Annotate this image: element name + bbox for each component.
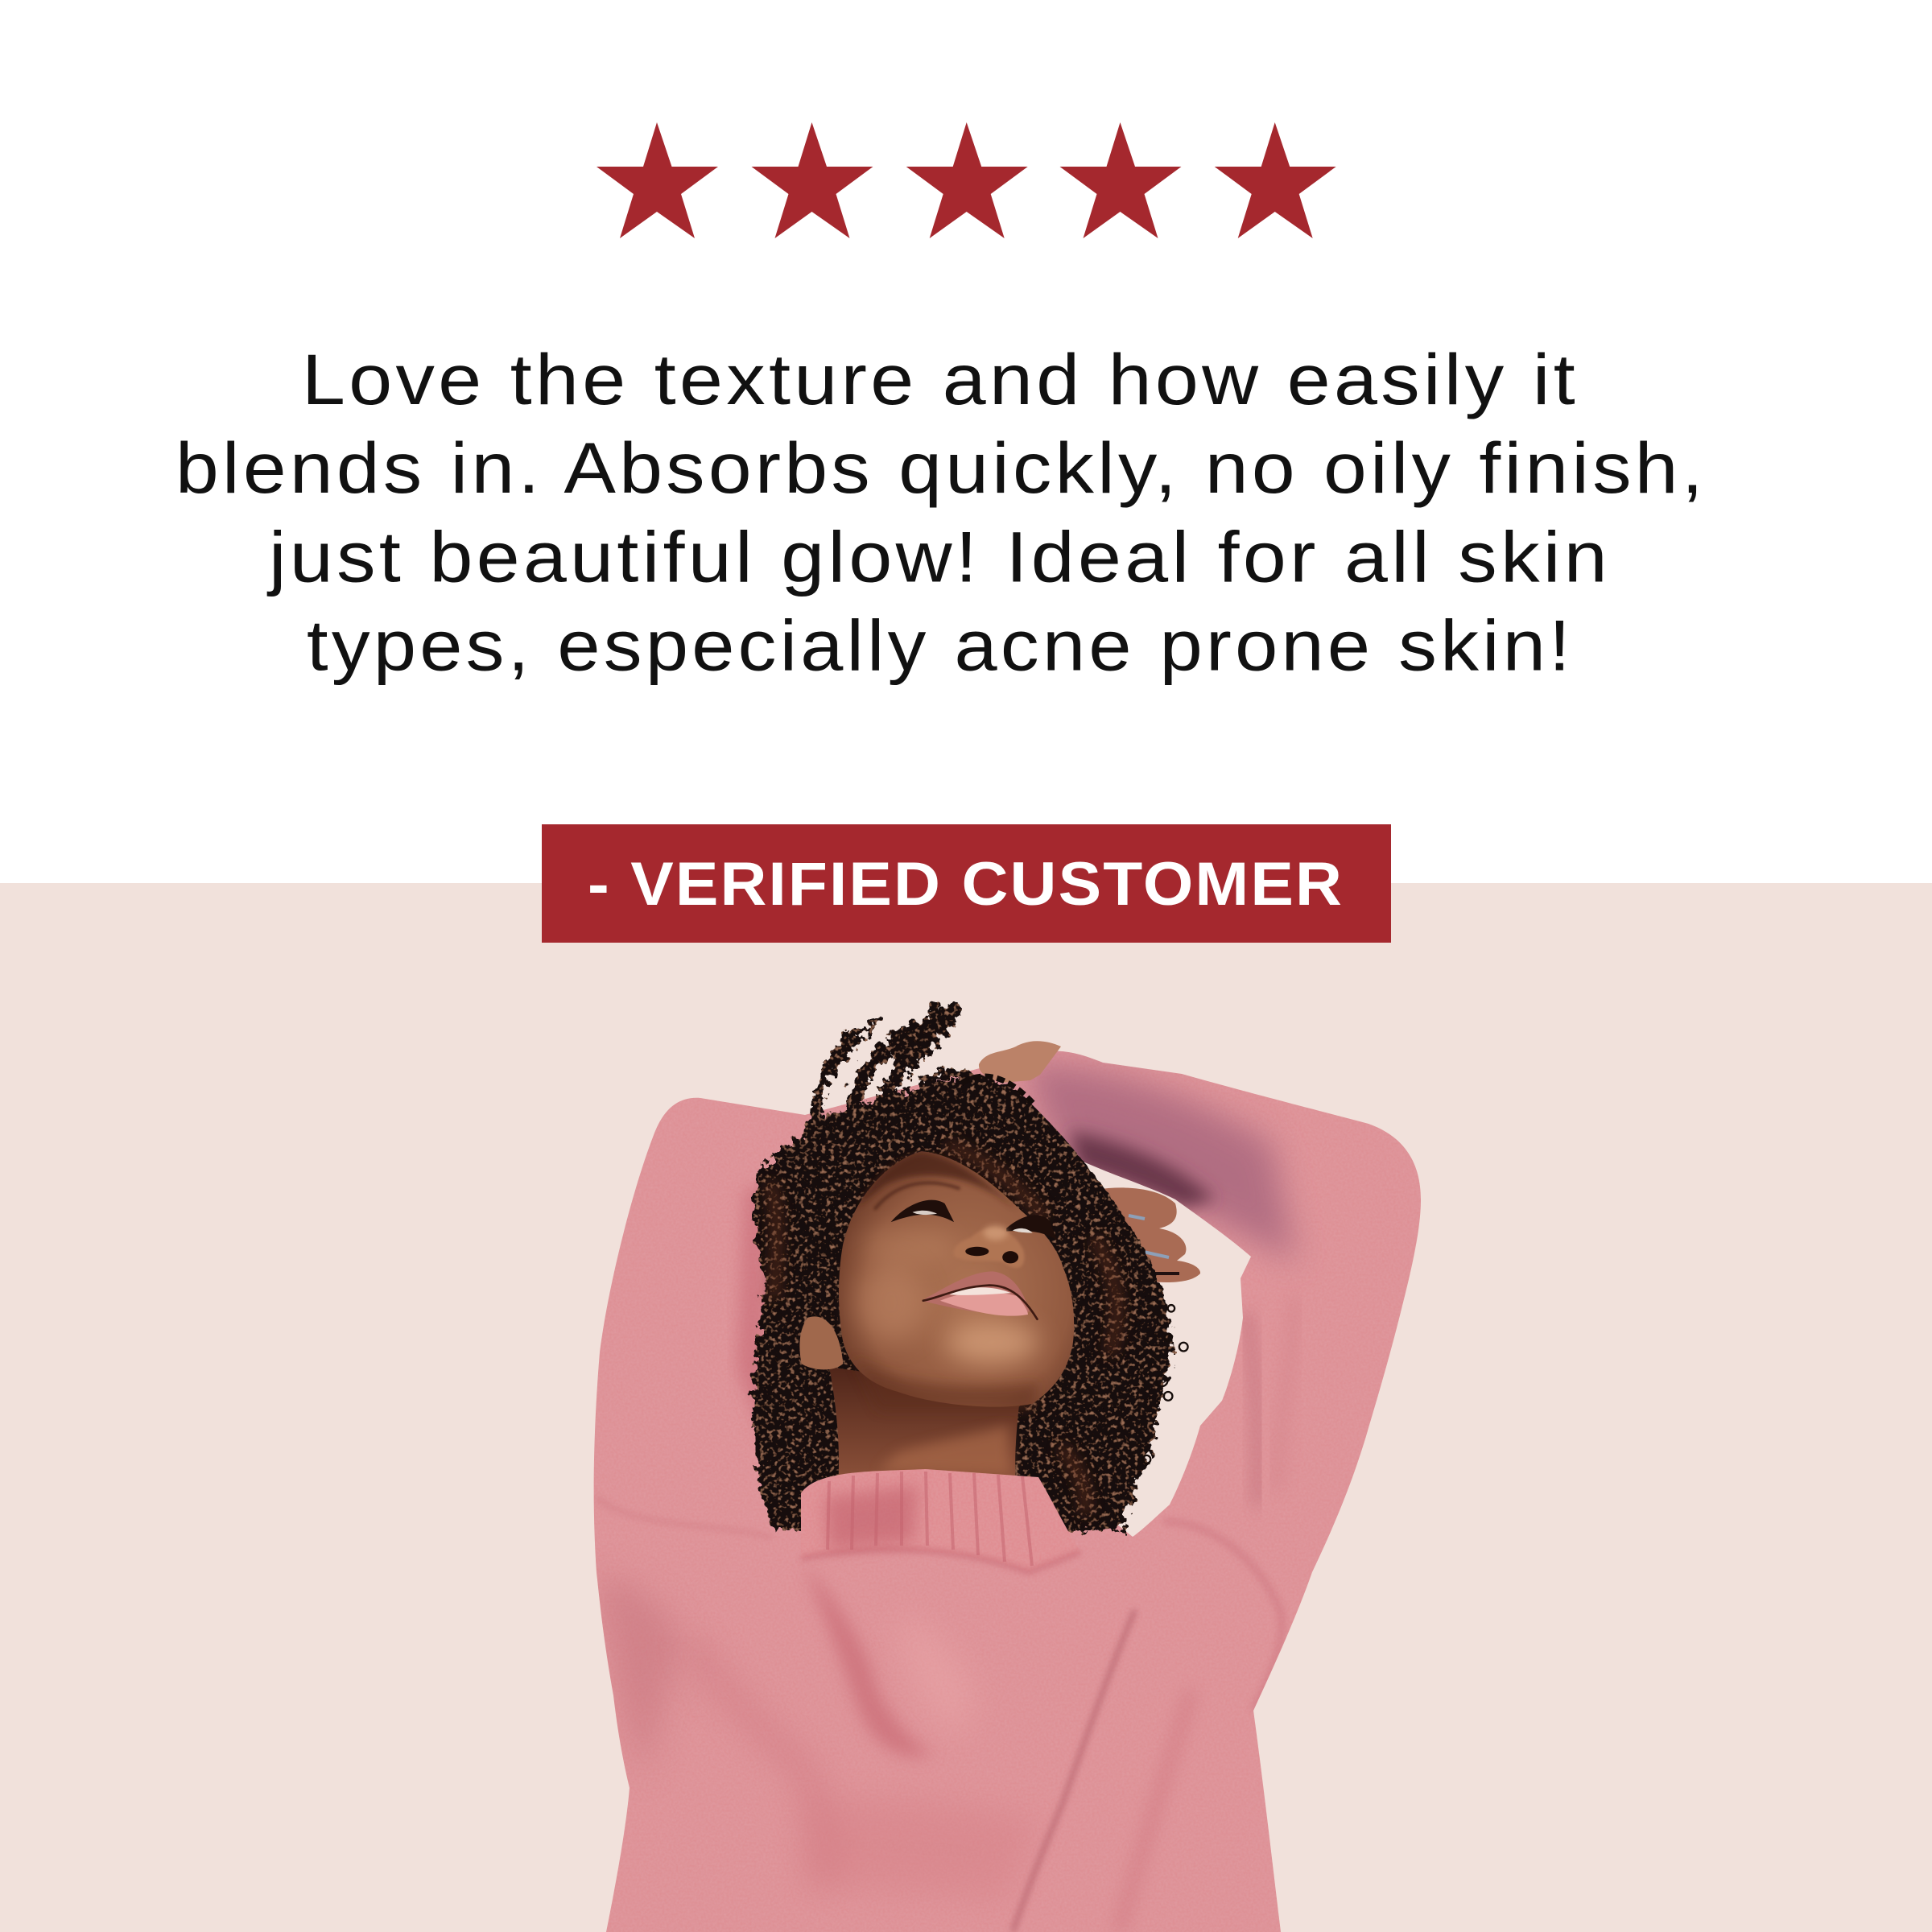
finger tattoo marks <box>1143 1272 1179 1275</box>
forearm deep shadow <box>1071 1131 1216 1208</box>
right sleeve seam shade <box>1163 1521 1282 1711</box>
forearm mauve shade <box>1022 1063 1296 1264</box>
nose <box>953 1225 1025 1268</box>
lower hand fingers <box>1095 1187 1200 1288</box>
forehead bang shadow <box>857 1153 1018 1210</box>
under collar fold <box>810 1578 927 1761</box>
left eyebrow <box>876 1183 959 1208</box>
hair mass <box>753 1078 1173 1530</box>
five star rating <box>597 122 1336 238</box>
sweater shading <box>596 1063 1296 1932</box>
gap between arm and hair <box>1022 1143 1251 1537</box>
right eye <box>1006 1215 1057 1241</box>
body highlight <box>900 1610 972 1739</box>
collar ribs <box>828 1472 1032 1566</box>
face <box>839 1151 1074 1407</box>
hair tuft on top <box>816 1006 971 1124</box>
left arm underside shade <box>601 1579 679 1748</box>
review quote text: blends in. Absorbs quickly, no oily finish, <box>175 427 1707 508</box>
verified customer badge <box>542 824 1391 943</box>
right body fold lines <box>1119 1690 1191 1932</box>
smile <box>922 1271 1037 1319</box>
sweater silhouette <box>594 1051 1421 1932</box>
review quote text: Love the texture and how easily it <box>302 339 1579 419</box>
lower body mottling <box>837 1810 1018 1887</box>
star 3 <box>906 122 1028 238</box>
finger rings <box>1129 1216 1169 1257</box>
sweater arms and body <box>594 1051 1421 1932</box>
inner right arm crease <box>1246 1312 1258 1505</box>
stray curls on right edge <box>1142 1305 1188 1463</box>
right diagonal crease <box>1013 1610 1135 1932</box>
verified customer badge: - VERIFIED CUSTOMER <box>588 850 1344 919</box>
upper hand fingers <box>962 1041 1061 1103</box>
review quote text: just beautiful glow! Ideal for all skin <box>266 517 1611 597</box>
ear <box>799 1316 843 1369</box>
review quote text: types, especially acne prone skin! <box>307 605 1574 686</box>
hair curls over hand <box>962 1076 1033 1103</box>
lower background panel <box>0 883 1932 1932</box>
review quote text <box>175 339 1707 686</box>
neck <box>829 1367 1020 1478</box>
collar fold shadow <box>801 1550 1080 1572</box>
right arm centre streak <box>1276 1296 1296 1489</box>
left arm inner shadow <box>737 1183 769 1449</box>
star 1 <box>597 122 718 238</box>
star 2 <box>752 122 873 238</box>
photo: smiling woman in pink sweater <box>594 1006 1421 1932</box>
left body fold <box>697 1650 821 1802</box>
jaw shadow <box>854 1358 1038 1410</box>
hair brown highlights <box>770 1145 1117 1515</box>
left arm seam fold <box>601 1500 610 1507</box>
left eye <box>891 1200 954 1222</box>
cheek highlights <box>857 1262 925 1342</box>
neck light <box>878 1426 1011 1475</box>
star 5 <box>1215 122 1336 238</box>
turtleneck collar <box>801 1469 1080 1572</box>
star 4 <box>1059 122 1182 238</box>
collar dark stain <box>825 1485 918 1550</box>
head and hair <box>753 1006 1188 1530</box>
